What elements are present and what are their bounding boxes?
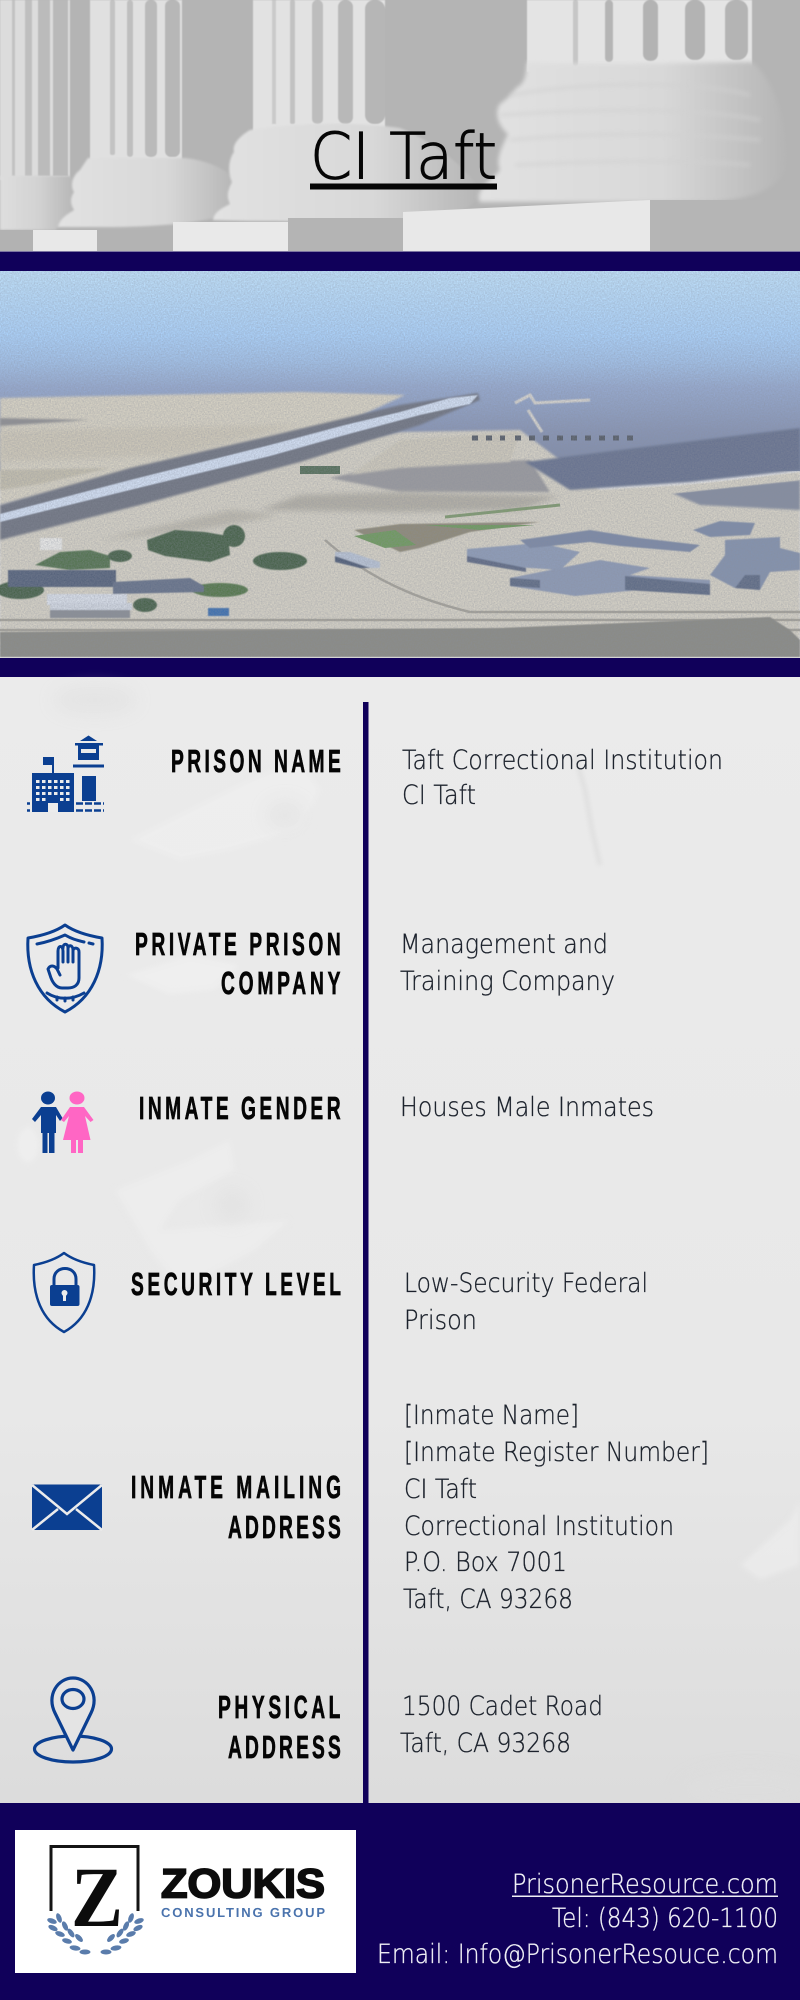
label: PRISON NAME xyxy=(171,743,341,779)
pillar 3 xyxy=(173,0,480,252)
value: CI Taft xyxy=(404,1474,477,1505)
row: physical address xyxy=(34,1678,603,1765)
value xyxy=(400,929,615,997)
label: SECURITY LEVEL xyxy=(131,1266,341,1302)
value xyxy=(402,745,723,811)
label: COMPANY xyxy=(221,965,340,1001)
row: prison name xyxy=(27,736,723,812)
pillar 4 xyxy=(403,0,800,252)
navy band under photo xyxy=(0,658,800,677)
value: Taft, CA 93268 xyxy=(400,1728,571,1759)
icon: envelope xyxy=(32,1484,102,1530)
road bands xyxy=(0,540,800,630)
contact details: PrisonerResource.com xyxy=(512,1869,778,1900)
paper crack stain xyxy=(575,755,600,865)
value: Low-Security Federal xyxy=(404,1268,648,1299)
title: CI Taft xyxy=(310,120,497,194)
row: inmate gender xyxy=(32,1090,654,1153)
value: Prison xyxy=(404,1305,477,1336)
value: Training Company xyxy=(400,966,615,997)
logo: Zoukis Consulting Group xyxy=(15,1830,356,1973)
midground grey flats xyxy=(330,460,550,492)
value: Taft Correctional Institution xyxy=(402,745,723,776)
ball field xyxy=(354,522,540,552)
foreground scrub xyxy=(0,617,800,657)
logo emblem xyxy=(46,1846,145,1954)
navy band top xyxy=(0,252,800,271)
logo wordmark: ZOUKIS xyxy=(161,1860,325,1906)
value: 1500 Cadet Road xyxy=(402,1691,603,1722)
photo grain xyxy=(0,271,800,657)
central vertical divider xyxy=(363,702,368,1803)
label: INMATE GENDER xyxy=(139,1090,341,1126)
value xyxy=(403,1400,709,1615)
header: courthouse pillars background xyxy=(0,0,800,252)
contact details xyxy=(377,1869,778,1970)
prison buildings xyxy=(8,521,800,618)
dark scrub right xyxy=(525,428,800,490)
white feature and road on the plain xyxy=(515,395,590,432)
label: PHYSICAL xyxy=(218,1689,340,1725)
midground sand xyxy=(0,430,800,640)
icon: shield with padlock xyxy=(34,1253,94,1332)
label: ADDRESS xyxy=(228,1509,341,1545)
value: Management and xyxy=(400,929,608,960)
row: private prison company xyxy=(28,925,615,1012)
paper panel xyxy=(0,677,800,1812)
logo emblem: Z xyxy=(71,1849,123,1945)
row: inmate mailing address xyxy=(32,1400,709,1615)
value xyxy=(404,1268,648,1336)
pillar 1 xyxy=(0,0,70,230)
value: Correctional Institution xyxy=(404,1511,674,1542)
trees xyxy=(0,525,307,612)
tree rows on horizon road xyxy=(472,436,633,440)
label: INMATE MAILING xyxy=(131,1469,341,1505)
pillar 2 xyxy=(33,0,238,252)
label xyxy=(131,1469,341,1545)
label xyxy=(218,1689,341,1765)
value: Taft, CA 93268 xyxy=(403,1584,573,1615)
row: security level xyxy=(34,1253,648,1336)
label xyxy=(135,926,341,1001)
canal water xyxy=(0,395,478,522)
icon: prison building and watchtower xyxy=(27,736,104,812)
icon: shield with raised hand xyxy=(28,925,102,1012)
value: [Inmate Register Number] xyxy=(404,1437,709,1468)
logo tagline: CONSULTING GROUP xyxy=(161,1905,325,1920)
value: Houses Male Inmates xyxy=(400,1092,654,1123)
value: [Inmate Name] xyxy=(404,1400,579,1431)
label: PRIVATE PRISON xyxy=(135,926,341,962)
aerial photo of the prison xyxy=(0,271,800,657)
footer band xyxy=(0,1803,800,2000)
icon: male and female figures xyxy=(32,1092,94,1153)
sand patch xyxy=(350,432,520,475)
icon: map pin xyxy=(34,1678,112,1762)
value xyxy=(400,1691,603,1759)
left desert field xyxy=(0,392,405,505)
canal corridor xyxy=(0,393,480,540)
value: CI Taft xyxy=(402,780,476,811)
label: ADDRESS xyxy=(228,1729,341,1765)
value: P.O. Box 7001 xyxy=(404,1547,567,1578)
